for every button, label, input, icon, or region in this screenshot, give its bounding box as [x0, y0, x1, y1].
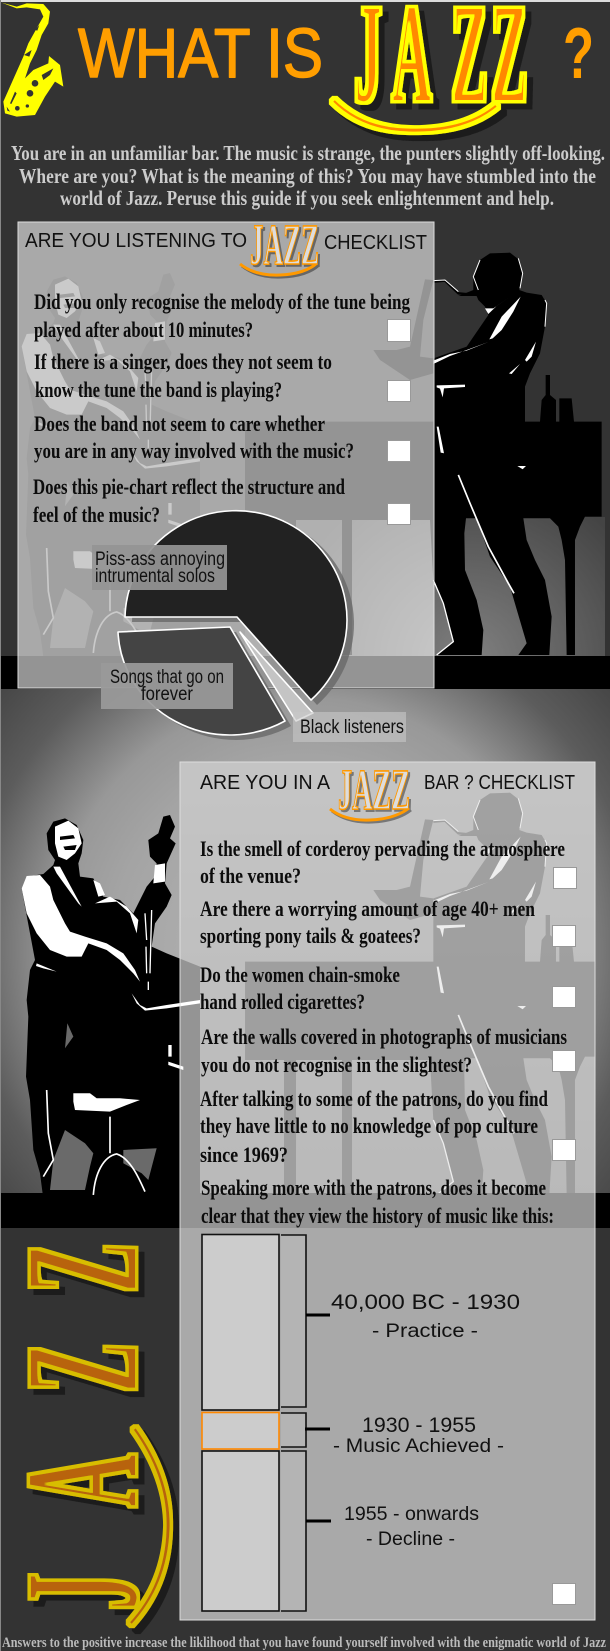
- question 1: of the venue?: [200, 863, 301, 888]
- bar: practice: [202, 1234, 279, 1410]
- pie label: songs: [101, 663, 233, 709]
- panel: are you listening to jazz checklist: [18, 212, 434, 688]
- checkbox 4: [388, 504, 410, 524]
- bracket: practice: [281, 1235, 330, 1407]
- panel: are you listening to jazz checklist: JAZZ: [250, 212, 319, 277]
- label: decline era: 1955 - onwards: [344, 1504, 479, 1525]
- question 3: [200, 962, 400, 1014]
- label: music achieved era: [333, 1414, 504, 1457]
- question 5: [200, 1086, 548, 1167]
- silhouette: saxophone player at table: [245, 253, 602, 655]
- question 1: played after about 10 minutes?: [34, 317, 253, 342]
- background: toned area behind second panel: [180, 762, 595, 1193]
- question 3: you are in any way involved with the music?: [34, 438, 354, 463]
- question 2: Are there a worrying amount of age 40+ men: [200, 896, 535, 921]
- logo: small jazz: [240, 212, 319, 277]
- pie label: songs: forever: [141, 684, 194, 705]
- panel: are you in a jazz bar checklist: JAZZ: [338, 757, 410, 822]
- silhouette: double bass player: [22, 815, 200, 1199]
- question 6: [201, 1175, 554, 1228]
- question 2: [34, 349, 332, 402]
- question 2: know the tune the band is playing?: [35, 377, 282, 402]
- bar: decline: [202, 1451, 279, 1611]
- label: decline era: [344, 1504, 479, 1550]
- question 3: Do the women chain-smoke: [200, 962, 400, 987]
- checkbox 2: [388, 380, 410, 402]
- ghost image: sax player behind second panel: [245, 793, 602, 1195]
- label: music achieved era: 1930 - 1955: [362, 1414, 476, 1437]
- question 4: [201, 1024, 567, 1077]
- label: music achieved era: - Music Achieved -: [333, 1436, 504, 1457]
- black band lower: [0, 1193, 610, 1228]
- pie slice: black listeners: [240, 632, 313, 721]
- heading: bar checklist: BAR ? CHECKLIST: [424, 772, 575, 794]
- question 2: If there is a singer, does they not seem to: [34, 349, 332, 374]
- pie slice: songs that go on forever: [118, 627, 285, 735]
- question 3: [34, 411, 354, 463]
- title: what is: WHAT IS: [78, 14, 323, 92]
- bar: music achieved: [202, 1412, 279, 1449]
- question 3: hand rolled cigarettes?: [200, 989, 365, 1014]
- pie label: songs: Songs that go on: [110, 667, 224, 688]
- heading: are you in a: ARE YOU IN A: [200, 772, 331, 794]
- label: practice era: [331, 1291, 520, 1342]
- bracket: decline: [281, 1451, 331, 1611]
- checkbox 1: [388, 320, 410, 342]
- question 2: [200, 896, 535, 948]
- question 3: Does the band not seem to care whether: [34, 411, 325, 436]
- heading: checklist: CHECKLIST: [324, 232, 427, 254]
- ghost image: bass player behind first panel: [22, 273, 200, 657]
- pie label: instrumental solos: [92, 545, 227, 590]
- question 4: feel of the music?: [33, 502, 160, 527]
- heading: are you listening to: ARE YOU LISTENING TO: [25, 230, 247, 252]
- question 5: since 1969?: [200, 1142, 288, 1167]
- question 4: Does this pie-chart reflect the structure and: [33, 474, 345, 499]
- question 2: sporting pony tails & goatees?: [200, 923, 421, 948]
- logo: small jazz: [330, 757, 410, 822]
- checkbox 5: [552, 1140, 576, 1160]
- checkbox 6: [552, 1584, 576, 1604]
- bracket: music achieved: [281, 1413, 330, 1447]
- background: gradient middle section: [0, 689, 610, 1194]
- label: practice era: - Practice -: [372, 1321, 478, 1342]
- label: practice era: 40,000 BC - 1930: [331, 1291, 520, 1314]
- pie label: black listeners: Black listeners: [300, 717, 404, 738]
- black band upper: [0, 656, 610, 689]
- question 1: Did you only recognise the melody of the tune being: [34, 289, 410, 314]
- panel: are you in a jazz bar checklist: [180, 757, 595, 1620]
- pie slice: instrumental solos: [125, 511, 347, 700]
- question 1: [200, 836, 565, 888]
- background: dark top section: [0, 0, 610, 690]
- pie label: instrumental solos: Piss-ass annoying: [95, 549, 225, 570]
- question 4: [33, 474, 345, 527]
- intro text: [11, 141, 605, 210]
- checkbox 4: [552, 1050, 576, 1072]
- background: dark bottom section: [0, 1228, 610, 1651]
- pie label: instrumental solos: intrumental solos: [95, 566, 215, 587]
- question 4: you do not recognise in the slightest?: [201, 1052, 472, 1077]
- icon: yellow saxophone: [2, 3, 63, 117]
- checkbox 3: [552, 986, 576, 1008]
- label: decline era: - Decline -: [366, 1529, 455, 1550]
- checkbox 1: [554, 868, 576, 888]
- background: lit area beneath the table: [245, 517, 605, 657]
- checkbox 2: [552, 926, 576, 946]
- title: question mark: ?: [563, 14, 594, 94]
- history of music bar chart: [202, 1234, 520, 1611]
- checkbox 3: [388, 440, 410, 462]
- pie chart: [92, 511, 406, 742]
- question 1: [34, 289, 410, 342]
- pie label: black listeners: [293, 712, 406, 742]
